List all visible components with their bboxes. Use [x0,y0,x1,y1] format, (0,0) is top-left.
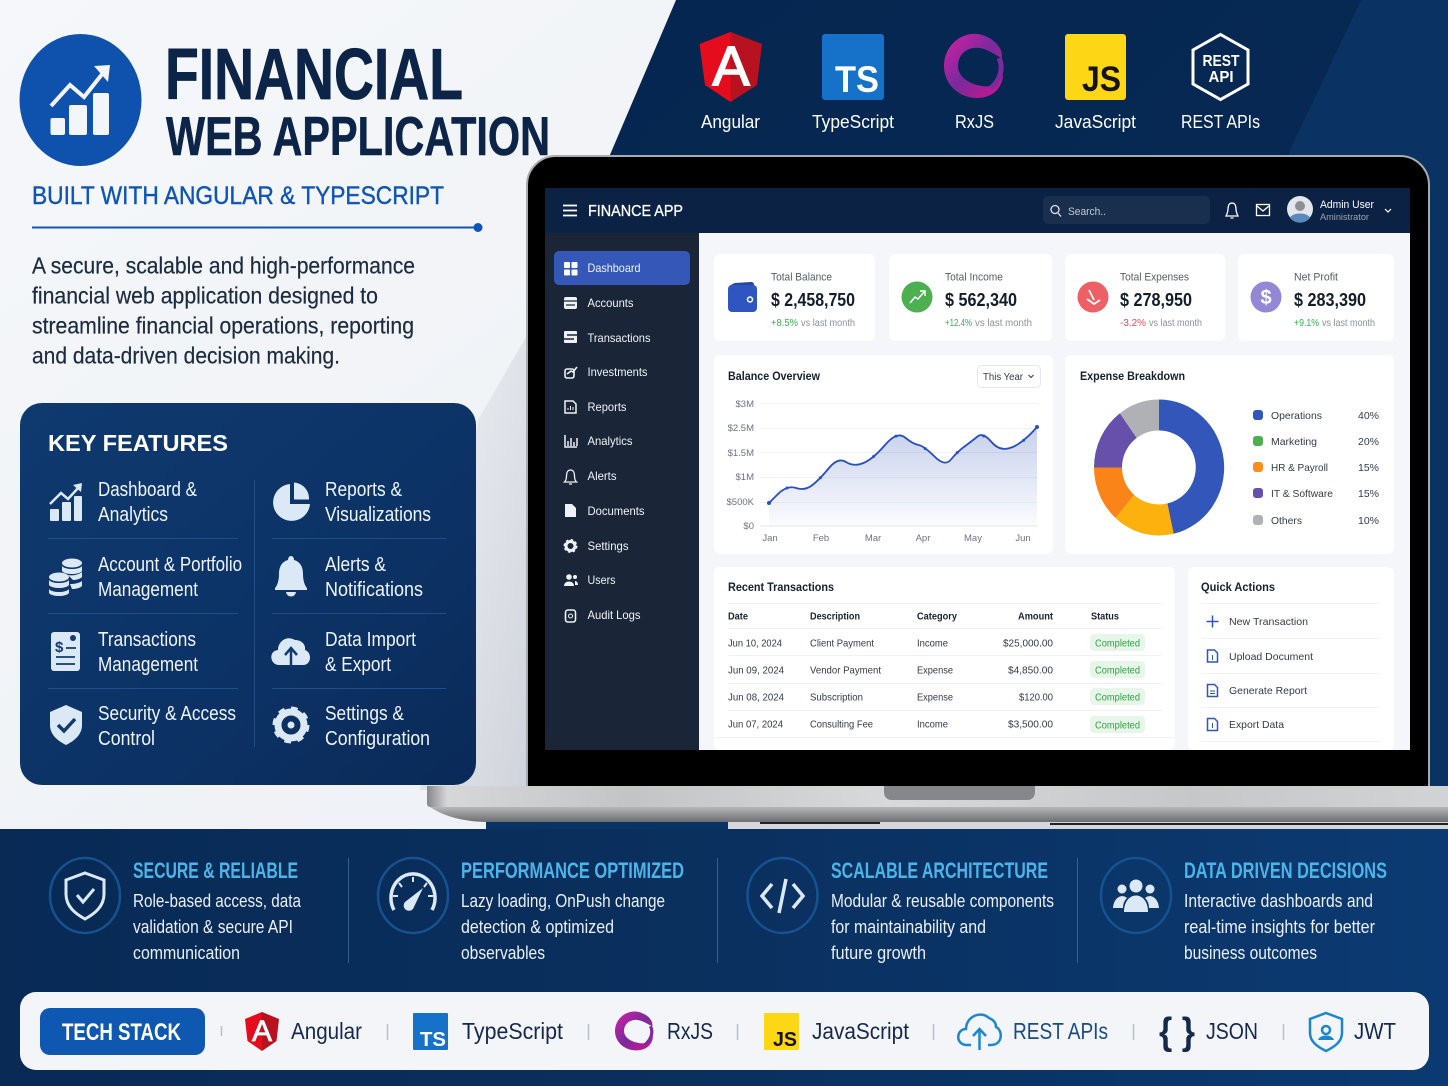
panel: quick actions: Quick Actions [1201,580,1275,594]
nav: dashboard: Dashboard [588,261,640,275]
row: Jun 09 [728,661,1145,678]
logo: REST APIs: API [1208,69,1234,86]
feature: transactions [51,629,198,676]
row: Jun 10: Income [917,638,948,650]
nav: alerts [564,469,616,484]
balance line [767,425,1039,505]
benefit: data driven decisions [1101,858,1387,963]
row: Jun 08: Expense [917,692,953,704]
stat card: net profit: Net Profit [1294,272,1338,284]
nav: users: Users [588,573,616,587]
benefit: secure and reliable [50,858,302,963]
nav: reports: Reports [588,400,626,414]
row: Jun 09: $4,850.00 [1008,664,1053,676]
laptop lid [527,156,1429,790]
donut chart [1094,399,1224,536]
area under line [769,427,1037,526]
legend: 15% [1358,462,1379,474]
stat card: total expenses: Total Expenses [1120,272,1189,284]
nav: reports [565,400,626,414]
benefit: scalable architecture: for maintainability and [831,917,986,937]
legend: 15% [1358,488,1379,500]
icon: menu [563,206,577,216]
item: TypeScript [413,1013,564,1051]
intro paragraph: and data-driven decision making. [32,342,340,368]
logo: Angular [700,32,762,132]
nav: transactions: Transactions [588,331,650,345]
item: JavaScript [764,1013,910,1051]
icon: logo circle [20,34,142,166]
table header: Amount [1018,610,1053,622]
laptop [427,156,1448,829]
benefit: scalable architecture: future growth [831,943,926,963]
icon: mail [1256,204,1270,216]
icon: shield [50,858,120,933]
legend: IT & Software [1271,488,1333,500]
table header: Date [728,610,748,622]
y axis labels: $500K [727,497,755,508]
item: JWT: JWT [1354,1018,1396,1044]
table header: Description [810,610,860,622]
benefit: performance optimized: detection & optimized [461,917,614,937]
benefit: secure and reliable: communication [133,943,240,963]
action: upload document: Upload Document [1229,651,1313,663]
logo: TypeScript [812,34,894,132]
item: JWT [1310,1013,1396,1051]
nav: documents [565,504,644,518]
nav: documents: Documents [588,504,644,518]
stat card: total income: $ 562,340 [945,290,1017,310]
stat card: total income: +12.4% [945,318,972,329]
benefits row [50,858,1387,963]
item: JavaScript: JavaScript [812,1018,910,1044]
row: Jun 09: Jun 09, 2024 [728,664,784,676]
intro paragraph: A secure, scalable and high-performance [32,252,415,278]
benefit: secure and reliable: SECURE & RELIABLE [133,858,298,883]
y axis labels: $0 [743,521,754,532]
screen [545,188,1410,750]
feature: alerts: Alerts & [325,554,387,576]
stat card: total expenses [1065,254,1225,341]
table header: Status [1091,610,1119,622]
x axis labels: Feb [813,533,829,544]
feature: dashboard and analytics [50,479,198,526]
legend: 20% [1358,436,1379,448]
item: Angular: A [252,1015,272,1048]
feature: account and portfolio: Management [98,579,198,601]
feature: data import and export: Data Import [325,629,416,651]
benefit: scalable architecture: Modular & reusable components [831,891,1054,911]
stat card: total income: Total Income [945,272,1003,284]
logo: Angular: Angular [701,112,760,132]
item: JSON [1159,1011,1258,1053]
benefit: performance optimized: observables [461,943,545,963]
row: Jun 09: Completed [1095,666,1140,676]
title line 1: FINANCIAL [165,35,463,115]
benefit: secure and reliable: validation & secure API [133,917,293,937]
row: Jun 09: Expense [917,664,953,676]
button: tech stack: TECH STACK [62,1019,182,1046]
y axis labels: $1.5M [728,448,754,459]
intro paragraph [32,252,415,368]
row: Jun 08: $120.00 [1019,692,1053,704]
row: Jun 09: Vendor Payment [810,664,881,676]
search box: Search.. [1068,206,1106,218]
logo: REST APIs [1181,34,1260,132]
row: Jun 08: Jun 08, 2024 [728,692,784,704]
nav: audit logs: Audit Logs [588,608,640,622]
icon: trend down [1078,282,1108,312]
panel: recent transactions: Recent Transactions [728,580,834,594]
nav: analytics: Analytics [588,434,632,448]
item: JSON: JSON [1206,1018,1258,1044]
dropdown: this year [978,366,1040,388]
feature: transactions: Management [98,654,198,676]
legend: HR & Payroll [1271,462,1328,474]
dark header background [531,0,1448,830]
legend: 10% [1358,515,1379,527]
row: Jun 07: Completed [1095,720,1140,732]
feature: reports: Reports & [325,479,403,501]
benefit: scalable architecture: SCALABLE ARCHITECTURE [831,858,1048,883]
row: Jun 08: Completed [1095,692,1140,704]
icon: trend up [902,282,932,312]
benefit: data driven decisions: real-time insights for better [1184,917,1375,937]
benefit: secure and reliable: Role-based access, data [133,891,302,911]
logo: RxJS: RxJS [955,112,994,132]
benefit: data driven decisions: Interactive dashboards and [1184,891,1373,911]
feature: settings: Settings & [325,703,405,725]
benefit: performance optimized: PERFORMANCE OPTIMIZED [461,858,684,883]
stat card: net profit: $ 283,390 [1294,290,1366,310]
user name: Admin User [1320,199,1374,211]
x axis labels: Apr [916,533,930,544]
item: TypeScript: TypeScript [462,1018,564,1044]
action: export data [1208,718,1284,731]
item: JavaScript: JS [773,1029,797,1051]
logo: REST APIs: REST APIs [1181,112,1260,132]
icon: people [1101,858,1171,933]
user role: Aministrator [1320,212,1369,222]
nav: analytics [565,434,632,448]
feature: data import and export [271,629,416,676]
benefit: data driven decisions: business outcomes [1184,943,1317,963]
panel: balance overview chart: Balance Overview [728,369,821,383]
x axis labels: Jan [762,533,778,544]
y axis labels: $1M [736,472,754,483]
stat card: net profit: vs last month [1322,318,1375,329]
intro paragraph: streamline financial operations, reporting [32,312,414,338]
benefit: performance optimized [378,858,684,963]
feature: security and access: Security & Access [98,703,236,725]
row: Jun 10 [728,634,1145,651]
feature: alerts: Notifications [325,579,423,601]
logo: JavaScript: JS [1082,60,1121,99]
intro paragraph: financial web application designed to [32,282,378,308]
item: TypeScript: TS [420,1029,446,1051]
x axis labels: May [964,533,982,544]
item: REST APIs [958,1015,1108,1050]
icon: dollar [1250,282,1282,312]
feature: account and portfolio [49,554,242,601]
icon: code [748,858,818,933]
stat card: net profit [1238,254,1394,341]
panel: key features [20,403,476,785]
feature: settings [275,703,430,750]
feature: settings: Configuration [325,728,430,750]
item: Angular: Angular [291,1018,362,1044]
top technology logos [700,32,1260,132]
feature: transactions: $ [55,639,64,656]
stat card: total expenses: vs last month [1149,318,1202,329]
row: Jun 07 [728,716,1145,733]
subtitle: BUILT WITH ANGULAR & TYPESCRIPT [32,182,444,210]
legend: Operations [1271,410,1322,422]
nav: settings [564,539,628,553]
item: RxJS [615,1012,713,1050]
stat card: total balance: $ 2,458,750 [771,290,855,310]
row: Jun 07: Consulting Fee [810,718,873,730]
stat card: total balance: vs last month [801,318,855,329]
logo: JavaScript: JavaScript [1055,112,1136,132]
legend: 40% [1358,410,1379,422]
stat card: total balance: +8.5% [771,318,798,329]
item: RxJS: RxJS [667,1018,713,1044]
panel: quick actions [1188,567,1394,750]
nav: users [564,573,616,587]
feature: dashboard and analytics: Dashboard & [98,479,198,501]
panel: expense breakdown [1065,355,1394,554]
button: tech stack [40,1008,205,1055]
y axis labels: $3M [736,399,754,410]
tech stack bar [20,992,1429,1070]
table header [728,610,1119,622]
row: Jun 10: Completed [1095,638,1140,650]
bottom band background [0,829,1448,1086]
legend: Others [1271,515,1302,527]
row: Jun 10: Client Payment [810,638,874,650]
feature: reports [273,479,431,526]
y axis labels [727,399,755,532]
app top bar [563,196,1391,224]
feature: transactions: Transactions [98,629,196,651]
user avatar [1287,196,1313,223]
stat card: net profit: +9.1% [1294,318,1319,329]
nav: accounts: Accounts [588,296,634,310]
feature: alerts [275,554,423,601]
action: generate report: Generate Report [1229,685,1307,697]
logo: REST APIs: REST [1202,53,1240,70]
logo: RxJS [944,34,1003,132]
nav: alerts: Alerts [588,469,616,483]
action: new transaction: New Transaction [1229,616,1308,628]
nav: dashboard [564,261,640,276]
benefit: performance optimized: Lazy loading, OnPush change [461,891,665,911]
icon: gauge [378,858,448,933]
x axis labels [762,533,1031,544]
app name: FINANCE APP [588,203,683,220]
dropdown: this year: This Year [983,372,1024,383]
chevron [1385,209,1391,212]
stat card: total balance: Total Balance [771,272,832,284]
title line 2: WEB APPLICATION [166,105,550,167]
row: Jun 07: Income [917,718,948,730]
stat card: total expenses: -3.2% [1120,318,1146,329]
logo: TypeScript: TS [835,59,879,100]
action: export data: Export Data [1229,719,1284,731]
panel: expense breakdown: Expense Breakdown [1080,369,1185,383]
row: Jun 07: $3,500.00 [1008,718,1053,730]
icon: wallet [728,282,757,312]
x axis labels: Jun [1015,533,1031,544]
stat card: total balance [714,254,875,341]
nav: investments: Investments [588,365,648,379]
nav: investments [565,365,648,379]
item: Angular [245,1012,362,1051]
item: REST APIs: REST APIs [1013,1018,1108,1044]
heading: key features: KEY FEATURES [48,430,228,456]
stat card: total income [889,254,1052,341]
nav: transactions [564,331,650,345]
feature: security and access: Control [98,728,155,750]
feature: security and access [50,703,236,750]
panel: recent transactions [714,567,1175,750]
legend: Marketing [1271,436,1317,448]
nav: settings: Settings [588,539,628,553]
row: Jun 10: $25,000.00 [1003,638,1053,650]
y axis labels: $2.5M [728,423,754,434]
table header: Category [917,610,957,622]
row: Jun 08: Subscription [810,692,863,704]
background grey wedge [420,330,530,790]
feature: account and portfolio: Account & Portfolio [98,554,242,576]
row: Jun 08 [728,688,1145,705]
laptop base [427,786,1448,829]
feature: data import and export: & Export [325,654,391,676]
subtitle rule [32,223,482,232]
nav: audit logs [566,608,640,622]
benefit: scalable architecture [748,858,1054,963]
item: JSON: { } [1159,1011,1195,1053]
logo: TypeScript: TypeScript [812,112,894,132]
logo: JavaScript [1055,34,1136,132]
header: logo and title [20,34,550,232]
icon: bell [1226,203,1238,218]
nav: accounts [564,296,634,310]
logo: Angular: A [712,34,750,97]
stat card: total income: vs last month [975,318,1032,329]
x axis labels: Mar [865,533,881,544]
feature: dashboard and analytics: Analytics [98,504,168,526]
panel: balance overview chart [714,355,1053,554]
feature: reports: Visualizations [325,504,431,526]
icon: dollar: $ [1260,287,1272,309]
row: Jun 07: Jun 07, 2024 [728,718,783,730]
stat card: total expenses: $ 278,950 [1120,290,1192,310]
sidebar navigation [554,251,690,622]
search box [1043,196,1210,224]
row: Jun 10: Jun 10, 2024 [728,638,782,650]
legend [1253,410,1379,527]
